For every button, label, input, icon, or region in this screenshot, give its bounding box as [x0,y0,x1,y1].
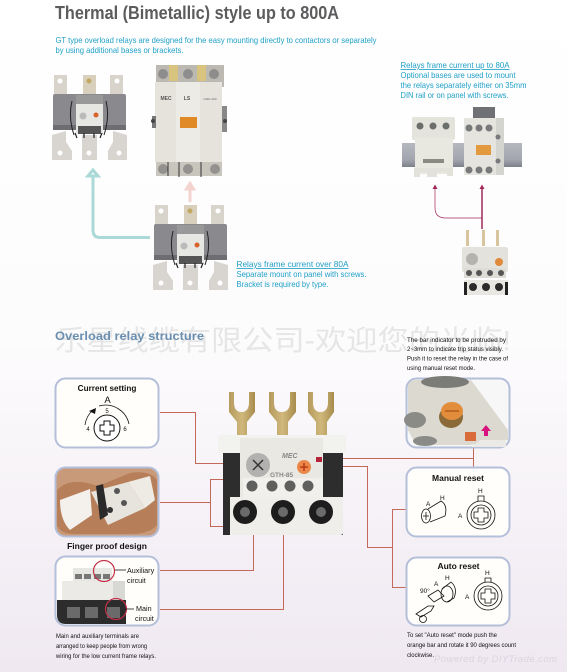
text: auto reset instructions: To set "Auto reset" mode push the [407,632,497,639]
icon: reset bar side view [422,501,446,523]
large relay with bracket, lower [153,205,228,290]
caption: terminal arrangement: Main and auxiliary terminals are [56,633,139,640]
text: frame current over 80A: Bracket is required by type. [236,280,328,289]
small contactor [464,107,504,175]
central overload relay: MEC [282,453,298,460]
text: frame current up to 80A: the relays separately either on 35mm [400,81,527,90]
label: auxiliary circuit: Auxiliary [127,566,155,575]
label: current setting: Current setting [78,384,136,393]
icon: rotating bar [416,582,455,622]
caption: terminal arrangement: arranged to keep people from wrong [56,643,147,650]
label: finger proof design: Finger proof design [67,541,147,551]
panel: manual reset: A [426,501,431,508]
text: bar indicator: The bar indicator to be protruded by [407,337,507,344]
icon: current dial: 6 [123,427,127,433]
icon: current dial: 4 [86,427,90,433]
label: main: Main [136,604,152,613]
text: frame current up to 80A: Optional bases are used to mount [400,71,516,80]
panel: current setting [56,378,158,448]
text: frame current over 80A: Relays frame current over 80A [236,260,349,269]
icon: current dial: 5 [105,409,109,415]
panel: auxiliary and main circuit terminals [56,556,158,626]
icon: current dial [85,395,129,441]
text: auto reset instructions: clockwise. [407,652,434,659]
caption: terminal arrangement: wiring for the low current frame relays. [55,653,156,660]
heading: overload relay structure: Overload relay structure [55,331,204,343]
arrows: magenta, small relay to base and contactor [432,184,484,229]
intro text: by using additional bases or brackets. [56,46,184,55]
intro text: GT type overload relays are designed for the easy mounting directly to contactors or separately [56,36,377,45]
watermark: powered by: Powered by DIYTrade.com [434,654,557,665]
text: frame current over 80A: Separate mount on panel with screws. [236,270,366,279]
arrow: pink, relay to contactor [186,184,194,202]
label: circuit: circuit [127,576,146,585]
text: frame current up to 80A [400,61,527,100]
panel: manual reset [406,468,510,536]
heading: manual reset: Manual reset [432,473,484,483]
icon: current dial: A [104,395,111,406]
panel: auto reset: H [445,575,450,582]
panel: auto reset: A [465,594,470,601]
large relay with bracket, top left [52,75,127,160]
text: auto reset instructions [407,632,516,659]
large contactor: MEC [160,96,172,102]
small mounting base [412,117,455,177]
label: main circuit: circuit [135,614,154,623]
text: bar indicator: using manual reset mode. [407,365,475,372]
caption: terminal arrangement [55,633,156,660]
connector lines [160,412,474,610]
watermark: Chinese company line: 乐星线缆有限公司-欢迎您的光临! [55,325,511,356]
panel: manual reset: H [440,495,445,502]
text: auto reset instructions: orange bar and rotate it 90 degrees count [407,642,516,649]
DIN rail [402,143,522,167]
panel: auto reset: 90° [420,587,430,595]
icon: reset dial, manual position [467,496,495,529]
arrow: teal, relay to bracket mount [88,170,150,238]
title: Thermal (Bimetallic) style up to 800A [55,3,339,23]
heading: auto reset: Auto reset [437,561,480,571]
large contactor: GMC-400 [203,97,217,101]
text: frame current up to 80A: DIN rail or on panel with screws. [400,91,508,100]
intro text [56,36,377,55]
text: bar indicator: 2~3mm to indicate trip status visibly. [407,346,503,353]
large contactor [151,65,227,177]
panel: auto reset: A [434,581,439,588]
text: frame current up to 80A: Relays frame current up to 80A [400,61,510,70]
panel: finger proof photo [56,468,158,536]
panel: auto reset: H [485,570,490,577]
text: bar indicator [407,337,508,372]
panel: reset bar photo [404,376,510,448]
central overload relay [218,392,346,535]
small overload relay [462,230,508,295]
forked terminals [229,392,334,435]
text: bar indicator: Push it to reset the relay in the case of [407,356,508,362]
large contactor: LS [184,96,191,102]
panel: manual reset: A [458,513,463,520]
central overload relay: GTH-85 [270,472,294,479]
panel: manual reset: H [478,488,483,495]
panel: auto reset [406,558,510,626]
icon: reset dial, auto position [474,578,502,610]
text: frame current over 80A [236,260,366,289]
